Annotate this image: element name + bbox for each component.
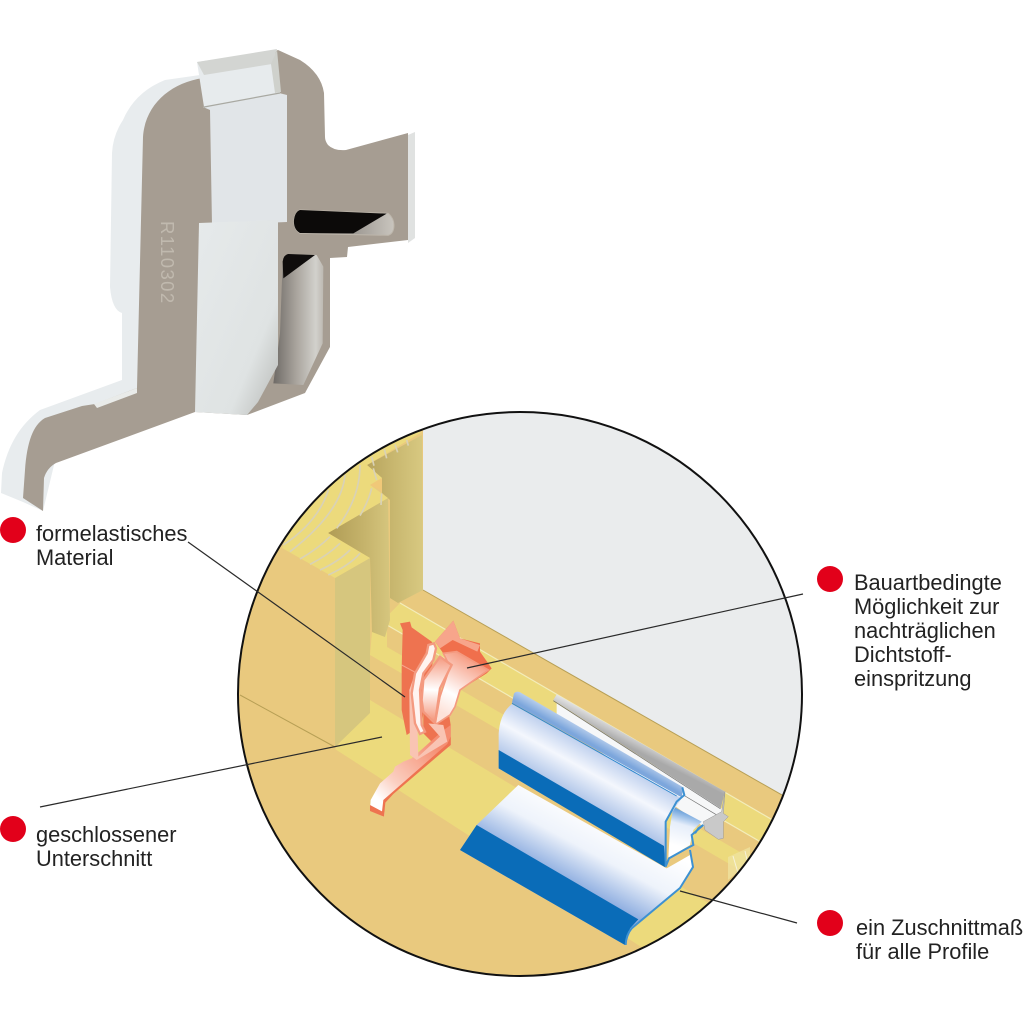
callout: ein Zuschnittmaß: für alle Profile: [856, 939, 989, 964]
grey strip: white base: [557, 703, 722, 827]
callout: Bauartbedingte Möglichkeit: [817, 566, 1002, 691]
wooden frame: middle side: [328, 498, 390, 637]
callout: geschlossener Unterschnitt: [0, 816, 177, 871]
callout: ein Zuschnittmaß: [817, 910, 1023, 964]
part: lower white block: [195, 220, 278, 415]
upper blue lip: [512, 692, 683, 797]
leader line: Dichtstoffeinspritzung: [467, 594, 803, 668]
horizontal slot: [294, 210, 394, 235]
upper blue band: [499, 750, 665, 867]
upper blue lip line: [512, 703, 677, 796]
callout: formelastisches Material: Material: [36, 545, 114, 570]
wall background: [423, 413, 801, 794]
clip: orange rear of foot: [423, 710, 451, 750]
detail circle: [239, 413, 801, 975]
leader line: formelastisches Material: [188, 542, 405, 697]
clip: light face: [435, 652, 488, 725]
lower recess: [273, 254, 323, 385]
recess shadow: [283, 254, 315, 278]
grey strip: top: [553, 694, 725, 808]
floor light lines: [388, 602, 772, 842]
part: horizontal slot and lower recess: [273, 210, 394, 385]
callout: Bauartbedingte Möglichkeit: Dichtstoff-: [854, 642, 952, 667]
part: white back edge: [1, 75, 210, 511]
floor seam lines: [240, 590, 782, 796]
floor band: lower yellow: [335, 700, 708, 947]
callout: formelastisches Material: [0, 517, 188, 570]
inner blue fold: [668, 807, 702, 858]
callout: geschlossener Unterschnitt: Unterschnitt: [36, 846, 152, 871]
part: right edge highlight: [408, 132, 415, 243]
leader line: Zuschnittmaß: [680, 891, 797, 923]
upper blue panel: [499, 704, 682, 867]
wooden frame: front side: [335, 558, 370, 747]
callout: Bauartbedingte Möglichkeit: Bauartbedingte: [854, 570, 1002, 595]
clip: middle face: [422, 657, 452, 723]
slot shadow: [294, 210, 387, 233]
floor band: narrow tan strip: [387, 626, 759, 855]
floor surface: [239, 430, 782, 975]
part: middle white block: [203, 93, 287, 225]
callout: geschlossener Unterschnitt: geschlossener: [36, 822, 177, 847]
circle outline: [238, 412, 802, 976]
photo: gasket clip part: [1, 49, 415, 511]
grey strip: shadow lines: [553, 701, 721, 817]
lower blue panel: [460, 785, 693, 945]
callout: Bauartbedingte Möglichkeit: einspritzung: [854, 666, 972, 691]
wood end patch at right: [728, 847, 750, 880]
clip: vertical leg: [409, 673, 447, 760]
callout: Bauartbedingte Möglichkeit: Möglichkeit zur: [854, 594, 999, 619]
leader line: geschlossener Unterschnitt: [40, 737, 382, 807]
clip: dark back: [400, 622, 436, 735]
lower blue outline: [626, 850, 693, 945]
clip: foot: [370, 725, 451, 817]
part: clip ridge: [271, 50, 281, 93]
callout: ein Zuschnittmaß: ein Zuschnittmaß: [856, 915, 1023, 940]
callout: formelastisches Material: formelastisches: [36, 521, 188, 546]
clip: narrow rib: [412, 643, 436, 734]
blue and grey profile illustration: [460, 692, 728, 945]
part: clip lip: [197, 49, 277, 75]
part: grey face: [23, 50, 408, 511]
clip: foot shadow edge: [370, 737, 451, 817]
clip: upper edge light: [435, 621, 480, 652]
lower blue band: [460, 825, 638, 945]
wooden frame: far side: [367, 435, 423, 603]
part: ledge highlight: [94, 388, 137, 408]
clip: back separator: [402, 665, 416, 673]
part: stamped number: R110302: [157, 221, 178, 305]
wooden frame: end grain: [282, 430, 422, 578]
part: clip shadow line: [204, 93, 280, 107]
upper blue outline: [666, 787, 703, 867]
clip: upper right block: [435, 621, 492, 690]
red clip illustration: [370, 621, 492, 817]
grey strip: end profile: [703, 792, 728, 839]
callout: Bauartbedingte Möglichkeit: nachträglichen: [854, 618, 996, 643]
floor band: upper yellow: [370, 604, 771, 863]
part: top clip: [197, 51, 280, 107]
